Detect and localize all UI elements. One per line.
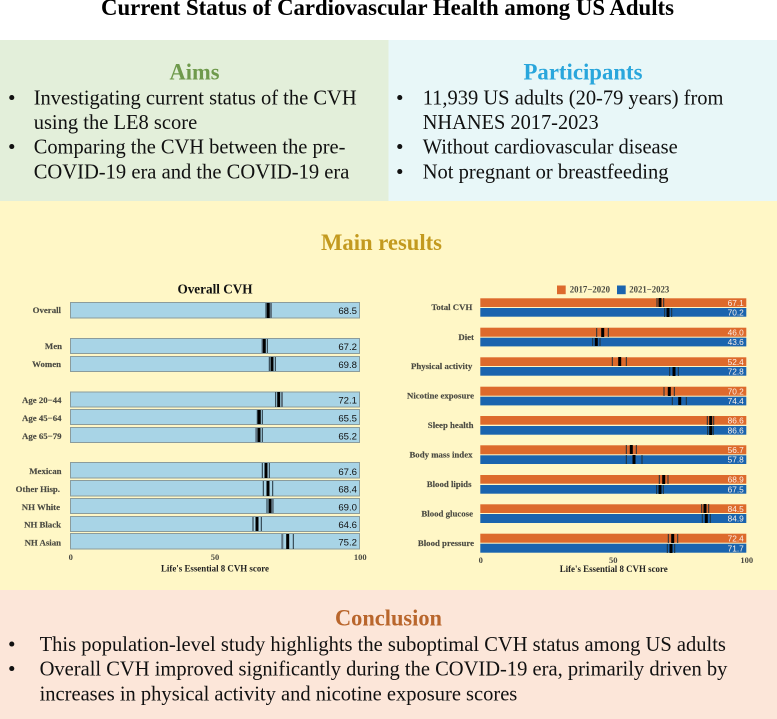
row: total CVH: 70.2 bbox=[728, 308, 744, 318]
participants bullet list: • bbox=[396, 86, 404, 110]
aims bullet list: • bbox=[8, 134, 16, 158]
row: women: 69.8 bbox=[338, 360, 357, 371]
row: other hispanic bbox=[16, 480, 360, 496]
row: blood pressure: 72.4 bbox=[728, 533, 744, 543]
row: blood lipids bbox=[427, 474, 746, 494]
row: diet bbox=[458, 327, 746, 347]
x axis: CVH by era: 50 bbox=[609, 555, 618, 565]
row: blood pressure bbox=[418, 533, 746, 553]
row: physical activity: 72.8 bbox=[728, 366, 744, 376]
x axis: overall CVH bbox=[69, 552, 367, 574]
participants bullet list: Not pregnant or breastfeeding bbox=[423, 160, 669, 184]
row: diet: Diet bbox=[458, 332, 474, 342]
row: men: Men bbox=[45, 341, 62, 351]
row: sleep health: Sleep health bbox=[428, 420, 474, 430]
conclusion bullet list: increases in physical activity and nicotine exposure scores bbox=[40, 682, 517, 706]
row: men: 67.2 bbox=[338, 342, 357, 353]
chart title: overall CVH: Overall CVH bbox=[177, 282, 253, 296]
chart: CVH by era bbox=[407, 286, 753, 574]
row: sleep health: 86.6 bbox=[728, 416, 744, 426]
aims bullet list: COVID-19 era and the COVID-19 era bbox=[34, 160, 350, 184]
row: NH white: 69.0 bbox=[338, 502, 357, 514]
row: age 20-44: 72.1 bbox=[338, 396, 357, 406]
row: blood glucose: 84.9 bbox=[728, 514, 744, 524]
row: mexican: 67.6 bbox=[338, 467, 357, 478]
row: women: Women bbox=[32, 359, 61, 369]
row: NH white bbox=[22, 498, 360, 514]
participants bullet list: • bbox=[396, 160, 404, 184]
row: overall: 68.5 bbox=[338, 306, 357, 317]
row: age 45-64: 65.5 bbox=[338, 414, 357, 424]
chart: overall CVH bbox=[16, 282, 367, 574]
heading: participants: Participants bbox=[524, 60, 643, 84]
row: age 45-64 bbox=[22, 410, 360, 424]
conclusion bullet list: • bbox=[8, 632, 16, 656]
row: other hispanic: Other Hisp. bbox=[16, 484, 60, 494]
row: physical activity: Physical activity bbox=[411, 361, 473, 371]
row: mexican: Mexican bbox=[29, 466, 62, 476]
x axis: CVH by era: Life's Essential 8 CVH score bbox=[560, 564, 668, 574]
panel: main results bbox=[0, 201, 777, 590]
row: nicotine exposure: 70.2 bbox=[728, 386, 744, 396]
x axis: CVH by era bbox=[479, 555, 753, 574]
row: body mass index bbox=[409, 445, 746, 465]
row: body mass index: 57.8 bbox=[728, 455, 744, 465]
aims bullet list bbox=[8, 86, 357, 184]
row: NH asian: NH Asian bbox=[25, 538, 61, 548]
row: blood pressure: 71.7 bbox=[728, 543, 744, 553]
legend: 2021−2023 bbox=[629, 286, 670, 296]
x axis: overall CVH: 0 bbox=[69, 552, 73, 562]
panel: conclusion bbox=[0, 590, 777, 719]
row: total CVH bbox=[431, 298, 746, 318]
row: age 65-79: Age 65−79 bbox=[22, 431, 62, 441]
participants bullet list: NHANES 2017-2023 bbox=[423, 110, 599, 134]
row: body mass index: 56.7 bbox=[728, 445, 744, 455]
row: other hispanic: 68.4 bbox=[338, 484, 358, 496]
row: blood glucose: Blood glucose bbox=[421, 508, 473, 518]
row: age 65-79: 65.2 bbox=[338, 432, 357, 442]
row: age 45-64: Age 45−64 bbox=[22, 413, 62, 423]
participants bullet list: Without cardiovascular disease bbox=[423, 134, 678, 158]
aims bullet list: using the LE8 score bbox=[34, 110, 197, 134]
row: nicotine exposure: Nicotine exposure bbox=[407, 390, 474, 400]
row: physical activity bbox=[411, 357, 746, 376]
row: sleep health: 86.6 bbox=[728, 426, 744, 436]
participants bullet list: • bbox=[396, 134, 404, 158]
row: blood glucose bbox=[421, 504, 746, 524]
row: NH asian bbox=[25, 534, 360, 549]
row: age 65-79 bbox=[22, 428, 360, 442]
row: body mass index: Body mass index bbox=[409, 450, 473, 460]
row: blood lipids: 67.5 bbox=[728, 484, 744, 494]
aims bullet list: Investigating current status of the CVH bbox=[34, 86, 357, 110]
row: diet: 46.0 bbox=[728, 327, 744, 337]
row: nicotine exposure: 74.4 bbox=[728, 396, 744, 406]
aims bullet list: • bbox=[8, 86, 16, 110]
heading: conclusion: Conclusion bbox=[335, 606, 442, 630]
aims bullet list: Comparing the CVH between the pre- bbox=[34, 134, 345, 158]
row: blood glucose: 84.5 bbox=[728, 504, 744, 514]
row: total CVH: Total CVH bbox=[431, 302, 472, 312]
x axis: CVH by era: 0 bbox=[479, 555, 483, 565]
conclusion bullet list: Overall CVH improved significantly during the COVID-19 era, primarily driven by bbox=[40, 656, 728, 680]
row: overall: Overall bbox=[33, 305, 62, 315]
conclusion bullet list bbox=[8, 632, 728, 706]
x axis: CVH by era: 100 bbox=[740, 555, 753, 565]
row: NH white: NH White bbox=[22, 502, 60, 512]
x axis: overall CVH: 50 bbox=[211, 552, 219, 562]
panel: aims bbox=[0, 40, 388, 201]
legend: 2017−2020 bbox=[570, 286, 610, 296]
x axis: overall CVH: Life's Essential 8 CVH score bbox=[161, 564, 269, 574]
row: physical activity: 52.4 bbox=[728, 357, 744, 367]
x axis: overall CVH: 100 bbox=[354, 552, 367, 562]
row: NH black: NH Black bbox=[24, 520, 61, 530]
row: total CVH: 67.1 bbox=[728, 298, 744, 308]
row: age 20-44: Age 20−44 bbox=[22, 395, 62, 405]
heading: main results: Main results bbox=[321, 230, 442, 255]
row: blood pressure: Blood pressure bbox=[418, 538, 474, 548]
row: NH black bbox=[24, 516, 360, 532]
row: NH black: 64.6 bbox=[338, 520, 357, 531]
panel: participants bbox=[388, 40, 777, 201]
row: diet: 43.6 bbox=[728, 337, 744, 347]
row: blood lipids: 68.9 bbox=[728, 474, 744, 484]
row: mexican bbox=[29, 462, 360, 478]
row: overall bbox=[33, 302, 360, 318]
row: women bbox=[32, 356, 360, 372]
legend bbox=[557, 286, 670, 296]
row: nicotine exposure bbox=[407, 386, 746, 406]
conclusion bullet list: This population-level study highlights the suboptimal CVH status among US adults bbox=[40, 632, 726, 656]
row: NH asian: 75.2 bbox=[338, 538, 357, 548]
participants bullet list bbox=[396, 86, 724, 184]
row: men bbox=[45, 338, 360, 354]
conclusion bullet list: • bbox=[8, 656, 16, 680]
participants bullet list: 11,939 US adults (20-79 years) from bbox=[423, 86, 724, 110]
row: blood lipids: Blood lipids bbox=[427, 479, 472, 489]
row: sleep health bbox=[428, 416, 746, 436]
heading: aims: Aims bbox=[170, 60, 220, 84]
row: age 20-44 bbox=[22, 392, 360, 407]
